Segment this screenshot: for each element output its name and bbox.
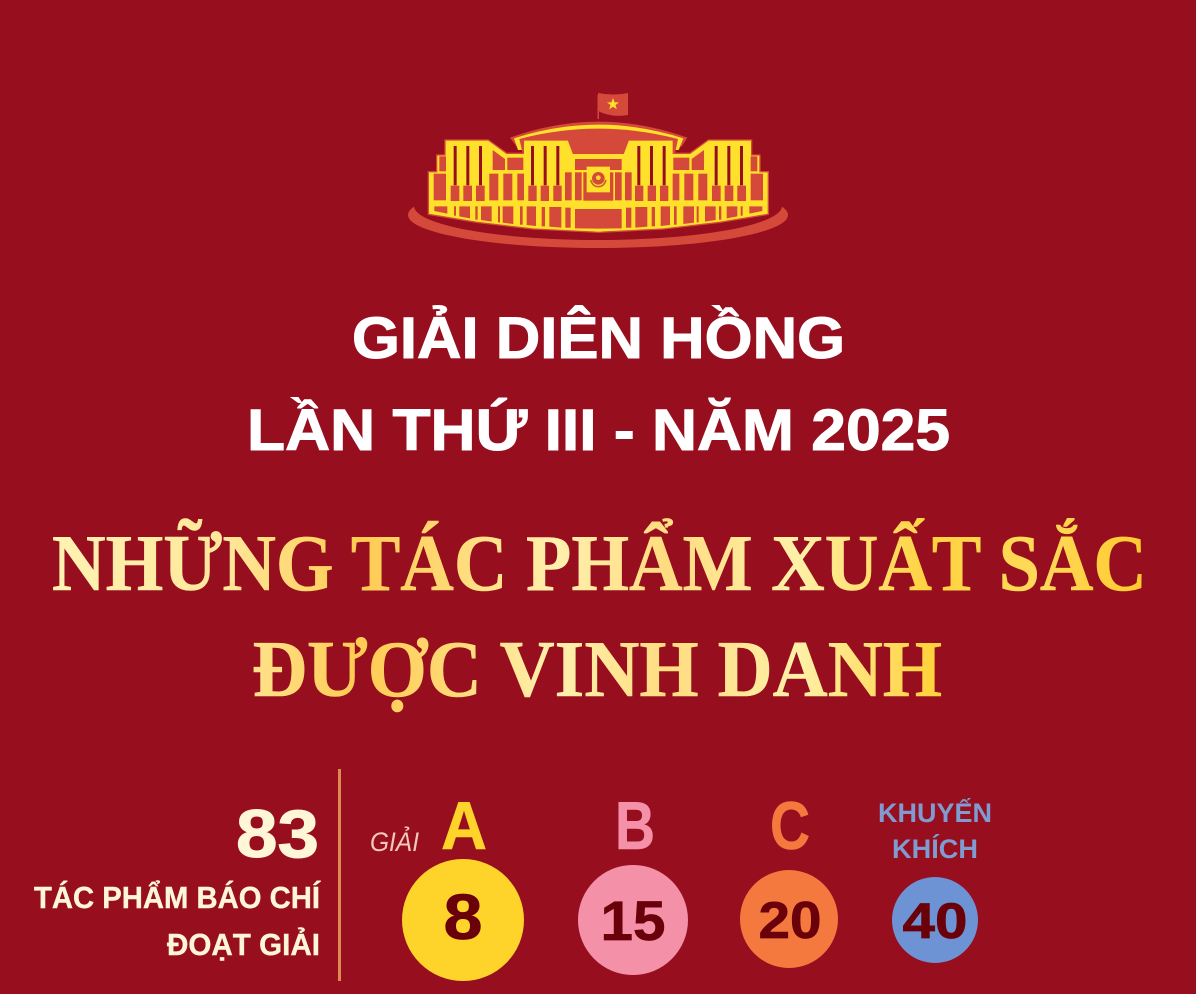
prize C: 20 — [758, 892, 822, 950]
stat: 83 award-winning works: ĐOẠT GIẢI — [167, 927, 320, 962]
heading: gold subtitle — [52, 518, 1147, 714]
prize A: A — [441, 788, 487, 864]
prize: khuyến khích: KHUYẾN — [878, 797, 992, 828]
stat: 83 award-winning works: TÁC PHẨM BÁO CHÍ — [34, 880, 321, 915]
prize C: C — [770, 788, 810, 864]
title: Giải Diên Hồng: LẦN THỨ III - NĂM 2025 — [247, 398, 950, 463]
prize: khuyến khích: KHÍCH — [892, 833, 978, 864]
prize: khuyến khích: 40 — [902, 893, 968, 949]
prize B — [578, 788, 688, 975]
prize A — [402, 788, 524, 981]
stat: 83 award-winning works: 83 — [236, 796, 319, 872]
prize A: 8 — [444, 881, 482, 953]
prize B: B — [615, 788, 655, 864]
prize B: 15 — [600, 889, 666, 952]
title: Giải Diên Hồng — [247, 306, 950, 463]
stat: 83 award-winning works — [34, 796, 321, 962]
divider — [338, 769, 341, 981]
icon: base swoosh — [408, 172, 788, 248]
icon: building drawing — [428, 122, 768, 232]
heading: gold subtitle: ĐƯỢC VINH DANH — [252, 626, 942, 714]
prize: khuyến khích — [878, 797, 992, 963]
label: giải: GIẢI — [370, 825, 419, 857]
icon: flag — [598, 93, 628, 119]
icon: National Assembly building with flag — [408, 93, 788, 248]
title: Giải Diên Hồng: GIẢI DIÊN HỒNG — [352, 306, 845, 371]
prize C — [740, 788, 838, 968]
